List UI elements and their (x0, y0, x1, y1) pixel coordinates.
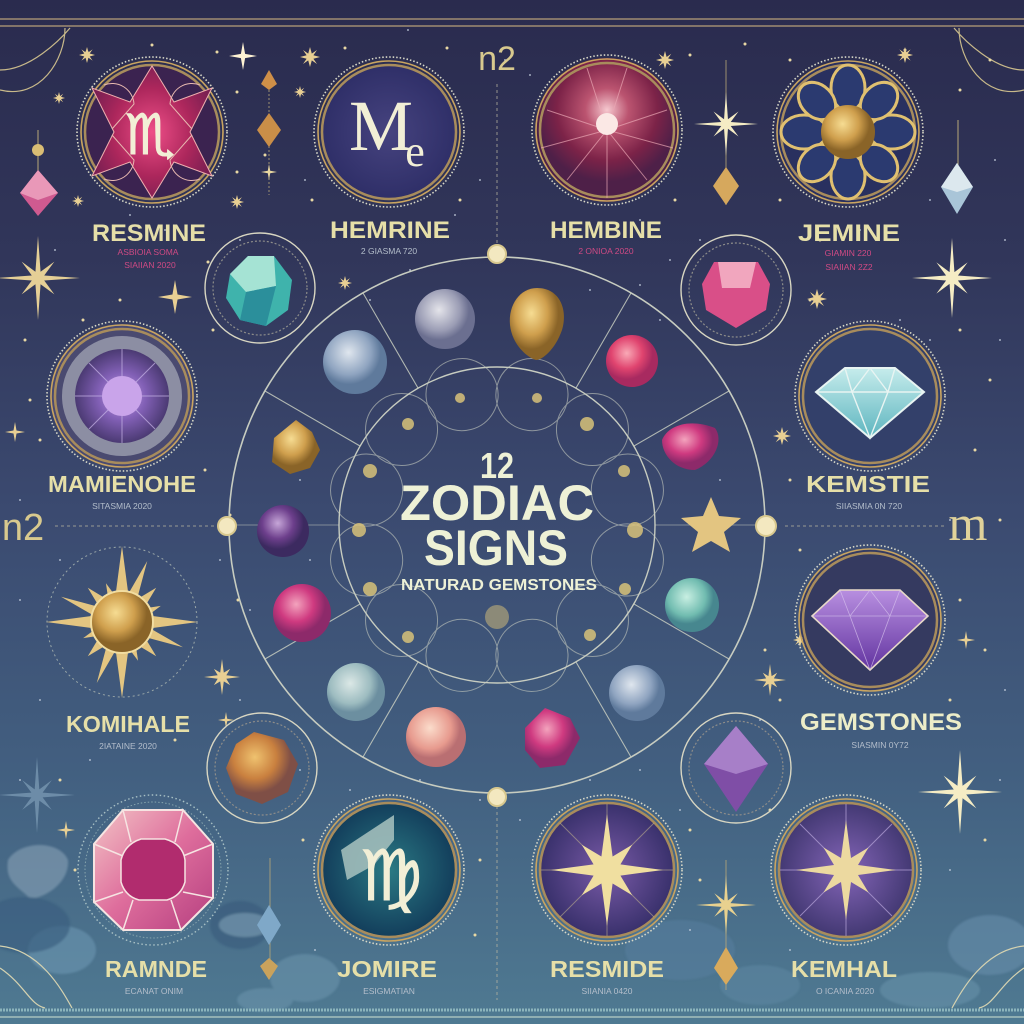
medallion 3: wine flower (532, 55, 682, 205)
zodiac glyph: m2 top: n2 (478, 40, 516, 78)
medallion 9: pink octagon gem (78, 795, 228, 945)
label 10: JOMIRE (337, 956, 437, 982)
label 11: RESMIDE (550, 956, 664, 982)
label 10: ESIGMATIAN (363, 986, 415, 996)
medallion 4: gold mandala (773, 57, 923, 207)
sign: M (349, 86, 413, 166)
label 7 (66, 711, 190, 751)
gem: star (681, 497, 741, 552)
label 8: SIASMIN 0Y72 (851, 740, 909, 750)
label 4: JEMINE (798, 220, 900, 247)
label 5: SITASMIA 2020 (92, 501, 152, 511)
label 1: RESMINE (92, 220, 206, 247)
title block (400, 445, 597, 594)
gem: blue-grey (323, 330, 387, 394)
small gem: teal (205, 233, 315, 343)
label 7: KOMIHALE (66, 711, 190, 737)
gem: pink (606, 335, 658, 387)
gem: ruby (662, 423, 718, 470)
medallion 11: violet star (532, 795, 682, 945)
wheel inner sign marks (352, 393, 643, 643)
zodiac glyph: m2 left: n2 (2, 507, 44, 549)
label 4: GIAMIN 220 (825, 248, 872, 258)
label 3: HEMBINE (550, 217, 662, 244)
central wheel (218, 245, 776, 806)
subtitle: NATURAD GEMSTONES (401, 577, 597, 594)
label 3: 2 ONIOA 2020 (578, 246, 634, 256)
label 7: 2IATAINE 2020 (99, 741, 157, 751)
label 2: 2 GIASMA 720 (361, 246, 417, 256)
gem: peach (406, 707, 466, 767)
gem: topaz (272, 420, 320, 474)
label 2: HEMRINE (330, 217, 450, 244)
medallion 10: teal virgo (314, 795, 464, 945)
gem: mint (665, 578, 719, 632)
label 9: ECANAT ONIM (125, 986, 183, 996)
label 4 (798, 220, 900, 272)
gem: magenta (525, 708, 580, 768)
wheel gemstones (257, 288, 741, 768)
label 2 (330, 217, 450, 256)
label 6: KEMSTIE (806, 471, 930, 497)
label 4: SIAIIAN 2Z2 (825, 262, 873, 272)
cabochon (121, 839, 185, 900)
interlaced lobes (323, 351, 671, 699)
gem: silver (415, 289, 475, 349)
sign: e (405, 127, 425, 176)
label 12: KEMHAL (791, 956, 897, 982)
label 8: GEMSTONES (800, 709, 962, 736)
pendant: left gem (20, 130, 58, 216)
label 1 (92, 220, 206, 270)
gem: gold (510, 288, 564, 360)
medallion 6: aqua diamond (795, 321, 945, 471)
faint star lower left (0, 757, 75, 833)
dashed guide lines (55, 84, 945, 1000)
medallion 8: violet diamond (795, 545, 945, 695)
label 3 (550, 217, 662, 256)
sign: ♏ (125, 103, 175, 168)
wheel nodes (218, 245, 776, 806)
pendant: upper centre-left (257, 70, 281, 195)
label 11: SIIANIA 0420 (581, 986, 633, 996)
small gem: pink (681, 235, 791, 345)
label 6 (806, 471, 930, 511)
small gem: purple kite (681, 713, 791, 823)
label 1: ASBIOIA SOMA (118, 247, 179, 257)
gold coin (821, 105, 875, 159)
medallion 5: amethyst flower (47, 321, 197, 471)
label 8 (800, 709, 962, 750)
sign: ♍ (360, 835, 422, 917)
gem: pale (327, 663, 385, 721)
label 5 (48, 471, 196, 511)
label 6: SIIASMIA 0N 720 (836, 501, 902, 511)
star and pendant lower centre (257, 858, 756, 990)
label 9 (105, 956, 207, 996)
large star left (0, 236, 80, 320)
label 12: O ICANIA 2020 (816, 986, 874, 996)
label 5: MAMIENOHE (48, 471, 196, 497)
medallion 1: crimson scorpio (77, 57, 227, 207)
medallion 2: navy sign (314, 57, 464, 207)
label 10 (337, 956, 437, 996)
sun disc (91, 591, 153, 653)
label 9: RAMNDE (105, 956, 207, 982)
gem: violet (257, 505, 309, 557)
medallion 12: purple star (771, 795, 921, 945)
pearl (596, 113, 618, 135)
large star right (912, 238, 992, 318)
title: 12: 12 (480, 445, 514, 486)
label 11 (550, 956, 664, 996)
pendant: right gem (941, 120, 973, 214)
label 1: SIAIIAN 2020 (124, 260, 176, 270)
gem: clear (609, 665, 665, 721)
wheel circles (229, 257, 765, 793)
zodiac glyph: m right: m (949, 495, 988, 551)
bottom clouds (0, 845, 1024, 1012)
title: signs: SIGNS (424, 520, 568, 576)
medallion 7: golden sun (36, 536, 208, 708)
large star lower right (918, 750, 1002, 834)
star and pendant upper right (694, 60, 758, 205)
gem: rose (273, 584, 331, 642)
label 12 (791, 956, 897, 996)
small gold stars (5, 42, 975, 839)
title: zodiac: ZODIAC (400, 475, 594, 531)
small gem: orange (207, 713, 317, 823)
